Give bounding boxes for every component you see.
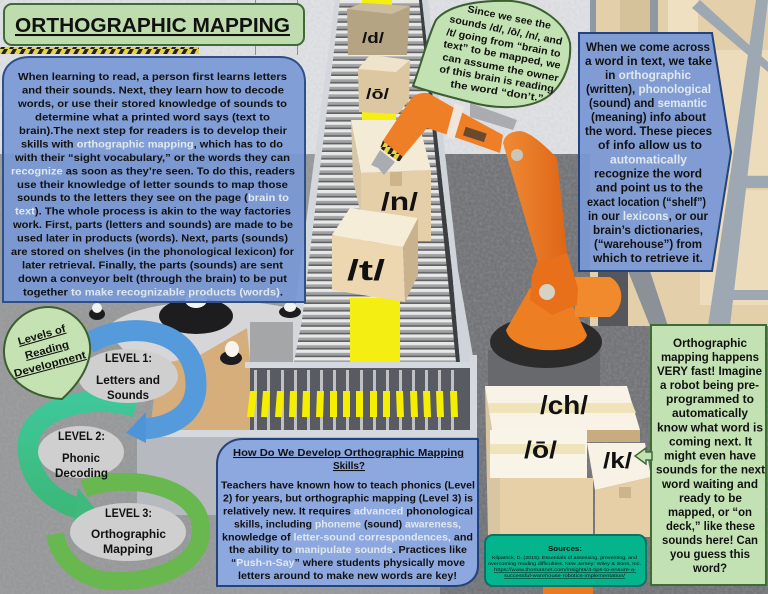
panel: how do we develop skills: Skills? <box>333 460 365 472</box>
speech bubble: don't: of this brain is reading <box>438 64 555 95</box>
panel: introduction text: later retrieval. Finally, the parts (sounds) are sent <box>22 260 284 272</box>
panel: introduction text: down a conveyor belt (through the brain) to be put <box>18 273 288 285</box>
level 1 <box>78 349 178 403</box>
box /ō/ <box>358 55 410 114</box>
panel: introduction text: determine what a printed word says (text to <box>35 111 270 123</box>
level 3: Orthographic <box>91 529 167 541</box>
panel: introduction text: words, or use their stored knowledge of sounds to <box>17 98 287 110</box>
box /t/: /t/ <box>347 255 385 287</box>
robot base disc <box>490 316 602 368</box>
level 1: Letters and <box>96 375 160 387</box>
panel: word recognition: brain’s dictionaries, <box>593 225 703 237</box>
panel: mapping happens fast: automatically <box>672 408 749 420</box>
robot pedestal <box>488 350 600 392</box>
panel: introduction text: recognize as soon as they’re seen. To do this, readers <box>11 165 295 177</box>
panel: mapping happens fast: mapped, or “on <box>668 507 752 519</box>
stack of on-deck boxes: /ch/ <box>540 390 588 420</box>
robot arm <box>371 93 621 392</box>
panel: mapping happens fast: sounds here! Can <box>662 535 758 547</box>
panel: word recognition: (written), phonological <box>586 84 711 96</box>
panel: how do we develop skills: skills, including phoneme (sound) awareness, <box>234 518 461 530</box>
panel: introduction text <box>3 57 305 302</box>
robot upper arm <box>503 131 567 262</box>
box /t/ <box>332 208 418 302</box>
panel: sources: successful-warehouse-robotics-implementation/ <box>504 573 626 579</box>
speech bubble: don't: the word “don’t.” <box>450 79 544 105</box>
main conveyor belt <box>286 0 474 362</box>
panel: word recognition: in our lexicons, or our <box>588 211 709 223</box>
panel: mapping happens fast: you guess this <box>670 549 750 561</box>
robot gripper <box>371 150 395 175</box>
box /n/ <box>351 120 431 241</box>
panel: sources: overcoming reading difficulties. New Jersey: Wiley & Sons, Inc. <box>488 561 641 567</box>
title <box>4 4 304 45</box>
panel: introduction text: When learning to read, a person first learns letters <box>18 71 287 83</box>
box /n/: /n/ <box>381 188 418 216</box>
panel: introduction text: are stored on shelves (in the phonological lexicon) for <box>11 246 294 258</box>
stack of on-deck boxes: /k/ <box>603 448 632 473</box>
panel: mapping happens fast: deck,” like these <box>666 521 755 533</box>
panel: word recognition: When we come across <box>586 42 710 54</box>
levels of reading development teardrop badge: Levels of <box>17 323 67 348</box>
green level 3 arrow <box>55 482 201 581</box>
hollow arrow to /k/ box <box>635 448 652 464</box>
level 2: Phonic <box>62 453 101 465</box>
panel: mapping happens fast: Orthographic <box>673 338 748 350</box>
panel: word recognition: of info allow us to <box>598 140 702 152</box>
box /k/ <box>587 443 651 490</box>
speech bubble: don't <box>413 1 570 107</box>
box /ō/: /ō/ <box>366 86 390 103</box>
panel: mapping happens fast: a robot being pre- <box>660 380 759 392</box>
panel: sources <box>485 535 646 586</box>
panel: how do we develop skills: knowledge of letter-sound correspondences, and <box>222 532 473 544</box>
panel: word recognition: exact location (“shelf”) <box>587 197 706 209</box>
panel: word recognition: (meaning) info about <box>591 112 706 124</box>
speech bubble: don't: Since we see the <box>466 4 552 32</box>
panel: introduction text: text). The whole process is akin to the way factories <box>15 206 291 218</box>
panel: mapping happens fast: might even have <box>664 450 756 462</box>
level 2 <box>38 426 124 480</box>
panel: introduction text: and their sounds. Next, they learn how to decode <box>22 84 284 96</box>
panel: mapping happens fast: word waiting and <box>661 479 758 491</box>
panel: mapping happens fast: ready to be <box>679 493 742 505</box>
panel: mapping happens fast <box>635 325 766 585</box>
level 1: Sounds <box>107 390 149 402</box>
levels of reading development teardrop badge: Reading <box>24 339 70 362</box>
level 2: LEVEL 2: <box>58 431 105 443</box>
panel: introduction text: used later in products (words). Next, parts (sounds) <box>17 233 288 245</box>
warehouse shelves <box>590 0 768 326</box>
panel: word recognition: which to retrieve it. <box>592 253 703 265</box>
robot motor <box>575 277 621 317</box>
box /ch/ <box>485 386 640 478</box>
panel: word recognition: in orthographic <box>605 70 692 82</box>
conveyor strip under sources <box>543 586 593 594</box>
panel: introduction text: skills with orthographic mapping , which has to do <box>21 138 283 150</box>
levels of reading development teardrop badge: Development <box>13 349 88 380</box>
box /d/ <box>347 3 410 55</box>
panel: introduction text: with their “sight vocabulary,” or the words they can <box>14 152 290 164</box>
box /ō/ lower <box>485 386 500 536</box>
panel: how do we develop skills <box>217 439 478 586</box>
panel: how do we develop skills: letters around to make new words are key! <box>238 570 457 582</box>
robot forearm <box>382 93 503 160</box>
level 1: LEVEL 1: <box>105 353 152 365</box>
panel: word recognition: (sound) and semantic <box>589 98 708 110</box>
robot wrist hazard band <box>380 141 403 162</box>
lower sorting conveyor <box>137 355 477 515</box>
speech bubble: don't: can assume the owner <box>441 52 560 84</box>
panel: how do we develop skills: Teachers have known how to teach phonics (Level <box>221 480 475 492</box>
panel: how do we develop skills: 2) for years, but orthographic mapping (Level 3) is <box>223 492 473 504</box>
panel: sources: Kilpatrick, D. (2015). Essentials of assessing, preventing, and <box>492 555 637 561</box>
panel: word recognition: automatically <box>610 154 688 166</box>
panel: word recognition: the word. These pieces <box>585 126 712 138</box>
teal level 2 arrow <box>28 401 136 522</box>
stack of on-deck boxes: /ō/ <box>524 437 557 464</box>
speech bubble: don't: text” to be mapped, we <box>442 39 562 72</box>
panel: introduction text: use their knowledge of letter sounds to map those <box>17 179 288 191</box>
blue level 1 arrow <box>88 331 196 443</box>
panel: introduction text: brain).The next step for readers is to develop their <box>19 125 287 137</box>
panel: how do we develop skills: How Do We Develop Orthographic Mapping <box>233 447 464 459</box>
level 3 <box>70 503 186 561</box>
robot elbow joint <box>530 253 578 315</box>
panel: how do we develop skills: the ability to manipulate sounds. Practices like <box>229 544 467 556</box>
level 2: Decoding <box>55 468 108 480</box>
level 3: Mapping <box>103 544 153 556</box>
title: ORTHOGRAPHIC MAPPING <box>15 14 290 37</box>
panel: sources: Sources: <box>548 544 582 553</box>
speech bubble: don't: sounds /d/, /ō/, /n/, and <box>448 14 563 48</box>
panel: mapping happens fast: sounds for the next <box>656 464 765 476</box>
panel: mapping happens fast: VERY fast! Imagine <box>657 366 762 378</box>
robot gripper stations behind the level graphic <box>89 292 301 430</box>
box /d/: /d/ <box>362 30 385 47</box>
speech bubble: don't: /t/ going from “brain to <box>445 27 561 60</box>
panel: introduction text: work. First, parts (letters and sounds) are made to be <box>12 219 293 231</box>
panel: introduction text: together to make recognizable products (words) . <box>23 286 283 298</box>
panel: how do we develop skills: relatively new. It requires advanced phonological <box>223 506 473 518</box>
panel: introduction text: sounds to the letters they see on the page ( brain to <box>17 192 289 204</box>
panel: word recognition: and point us to the <box>596 182 703 194</box>
panel: sources: https://www.thomasnet.com/insights/4-tips-to-ensure-a- <box>494 567 636 573</box>
panel: word recognition: a word in text, we take <box>585 56 712 68</box>
panel: how do we develop skills: “Push-n-Say” where students physically move <box>231 557 465 569</box>
hazard stripe <box>0 47 199 54</box>
level 3: LEVEL 3: <box>105 508 152 520</box>
levels of reading development teardrop badge <box>4 307 90 399</box>
panel: word recognition <box>579 33 731 271</box>
stack of on-deck boxes <box>485 386 651 538</box>
panel: word recognition: (“warehouse”) from <box>594 239 702 251</box>
panel: mapping happens fast: know what word is <box>657 422 763 434</box>
panel: mapping happens fast: mapping happens <box>661 352 759 364</box>
robot base cone <box>506 288 587 350</box>
panel: mapping happens fast: coming next. It <box>669 436 752 448</box>
panel: mapping happens fast: programmed to <box>666 394 754 406</box>
panel: mapping happens fast: word? <box>692 563 727 575</box>
panel: word recognition: recognize the word <box>594 168 702 180</box>
